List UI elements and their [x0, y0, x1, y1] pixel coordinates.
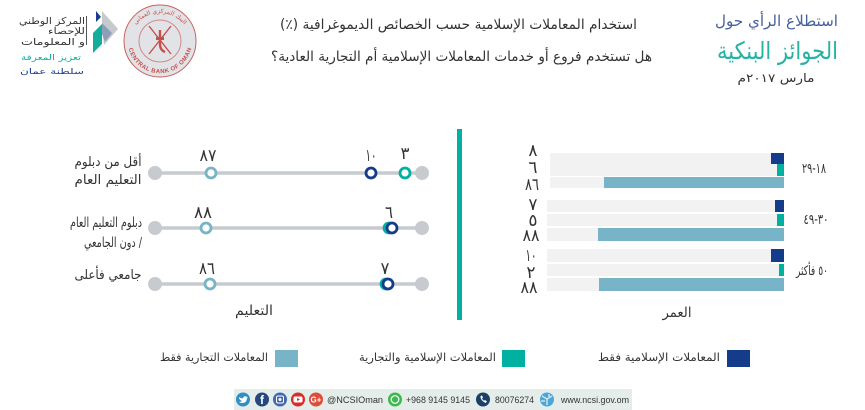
logo: NCSI: تعزيز المعرفة	[21, 53, 81, 62]
icon: phone	[476, 392, 490, 406]
title	[271, 17, 652, 65]
logo: Central Bank of Oman seal	[124, 4, 196, 78]
logo: NCSI	[19, 11, 118, 76]
row: university and above	[74, 259, 429, 291]
icon: facebook	[255, 392, 269, 407]
panel: education dot chart	[70, 144, 429, 319]
footer contact bar: 80076274	[495, 395, 534, 406]
age group 30-49: ٣٠-٤٩	[804, 212, 828, 228]
footer contact bar: www.ncsi.gov.om	[560, 395, 629, 405]
age group 30-49: ٨٨	[522, 226, 540, 246]
footer contact bar: @NCSIOman	[327, 395, 383, 405]
row: university and above: ٨٦	[199, 259, 215, 279]
logo: NCSI: سلطنة عمان	[20, 67, 84, 76]
legend item: Islamic and commercial: المعاملات الإسلامية والتجارية	[359, 350, 496, 365]
panel: age bar chart	[520, 141, 828, 321]
divider	[457, 129, 462, 320]
age group 50 and over: ١٠	[526, 246, 536, 266]
row: general diploma to pre-university: ٨٨	[194, 203, 212, 223]
row: general diploma to pre-university	[70, 203, 429, 251]
legend item: commercial only: المعاملات التجارية فقط	[160, 350, 268, 365]
icon: google plus	[309, 392, 323, 406]
emblem: crossed swords and khanjar	[149, 26, 171, 54]
row: below general diploma: ١٠	[366, 146, 376, 166]
row: general diploma to pre-university: دبلوم التعليم العام	[70, 215, 142, 231]
title: هل تستخدم فروع أو خدمات المعاملات الإسلامية أم التجارية العادية؟	[271, 47, 652, 65]
legend item: Islamic only: المعاملات الإسلامية فقط	[598, 350, 720, 364]
icon: google plus: G+	[311, 396, 322, 404]
age group 18-29: ٨٦	[525, 175, 539, 195]
legend item: commercial only	[160, 350, 298, 367]
logo mark	[93, 11, 118, 53]
report heading: استطلاع الرأي حول	[715, 11, 838, 31]
row: general diploma to pre-university: ٦	[385, 203, 393, 223]
age group 50 and over	[520, 246, 828, 298]
row: below general diploma: ٨٧	[200, 146, 216, 166]
logo: Central Bank of Oman seal: CENTRAL BANK OF OMAN	[129, 48, 192, 74]
row: university and above: جامعي فأعلى	[74, 265, 142, 283]
age group 18-29: ٦	[528, 158, 538, 178]
logo: NCSI: و المعلومات	[21, 37, 85, 48]
axis label: education: التعليم	[235, 303, 273, 319]
icon: globe	[540, 392, 554, 406]
row: general diploma to pre-university: / دون الجامعي	[84, 235, 142, 251]
axis label: age: العمر	[662, 305, 692, 321]
report heading: الجوائز البنكية	[717, 37, 838, 65]
footer contact bar: +968 9145 9145	[406, 395, 470, 406]
row: below general diploma: أقل من دبلوم	[74, 153, 142, 170]
footer contact bar	[234, 389, 632, 410]
icon: whatsapp	[388, 392, 402, 406]
legend	[160, 350, 750, 367]
legend item: Islamic only	[598, 350, 750, 367]
age group 30-49: ٥	[528, 211, 538, 231]
row: below general diploma	[74, 144, 429, 188]
age group 50 and over: ٢	[526, 263, 536, 283]
title: استخدام المعاملات الإسلامية حسب الخصائص الديموغرافية (٪)	[280, 17, 637, 33]
logo: NCSI: للإحصاء	[48, 27, 85, 37]
age group 18-29	[525, 141, 826, 195]
icon: twitter	[236, 392, 250, 406]
row: below general diploma: ٣	[400, 144, 410, 164]
age group 30-49: ٧	[528, 195, 538, 215]
logo: NCSI: المركز الوطني	[19, 16, 85, 27]
age group 18-29: ٨	[528, 141, 538, 161]
row: below general diploma: التعليم العام	[74, 173, 142, 188]
legend item: Islamic and commercial	[359, 350, 525, 367]
report heading	[715, 11, 838, 86]
report heading: مارس ٢٠١٧م	[738, 71, 814, 86]
icon: facebook: f	[260, 393, 265, 407]
icon: youtube	[291, 392, 305, 406]
row: university and above: ٧	[380, 259, 390, 279]
age group 18-29: ١٨-٢٩	[802, 161, 826, 177]
age group 50 and over: ٨٨	[520, 278, 538, 298]
age group 30-49	[522, 195, 828, 246]
icon: instagram	[273, 392, 287, 406]
logo: Central Bank of Oman seal: البنك المركزي العماني	[135, 8, 188, 24]
age group 50 and over: ٥٠ فأكثر	[795, 261, 828, 279]
